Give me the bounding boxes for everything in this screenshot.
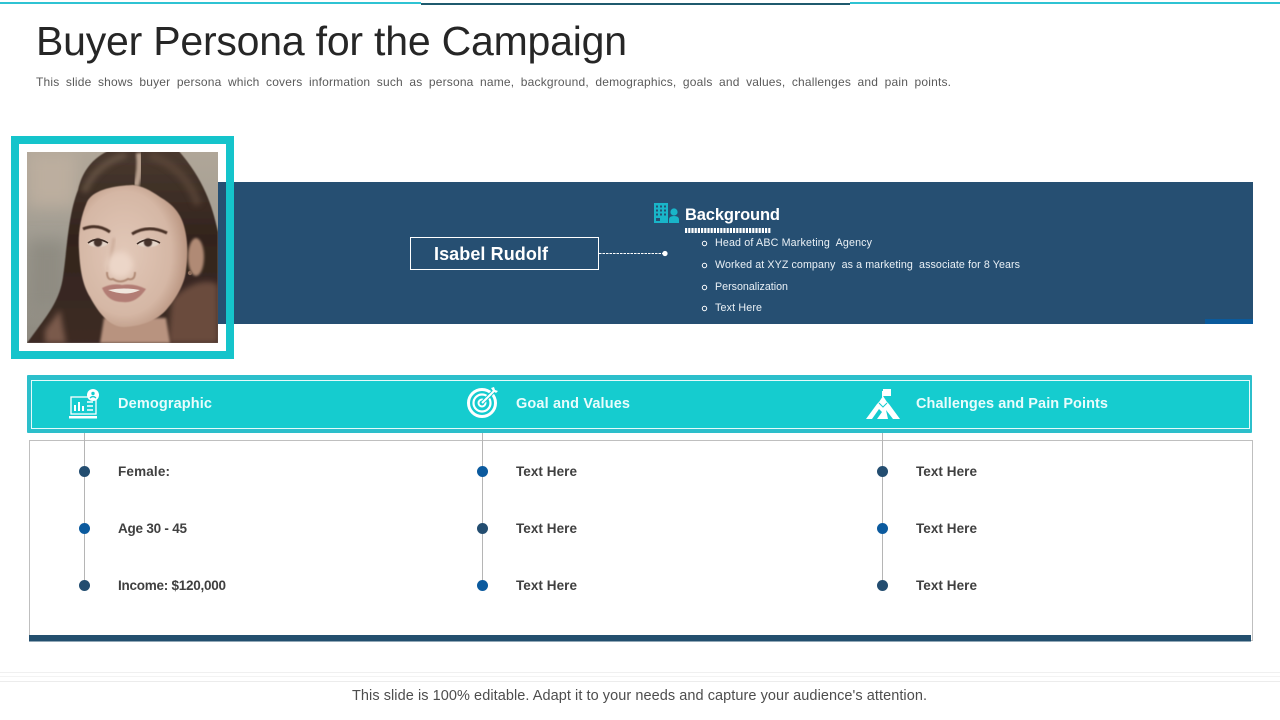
column: challenges details: Text Here [916, 578, 977, 593]
heading: goal and values: Goal and Values [516, 396, 630, 412]
background bullet list: Personalization [715, 281, 788, 293]
column: goal and values details: Text Here [516, 521, 577, 536]
column: challenges details: Text Here [916, 521, 977, 536]
column: demographic details: Female: [118, 464, 170, 479]
heading: challenges and pain points: Challenges and Pain Points [916, 396, 1108, 412]
background bullet list: Worked at XYZ company as a marketing associate for 8 Years [715, 259, 1020, 271]
persona photo frame [11, 136, 234, 359]
column: goal and values details: Text Here [516, 464, 577, 479]
panel: background banner [218, 182, 1253, 324]
portrait illustration [27, 150, 218, 343]
subtitle: This slide shows buyer persona which covers information such as persona name, background, demographics, goals and values, challenges and pain points. [36, 75, 951, 89]
column: goal and values details [477, 433, 577, 593]
column: demographic details: Age 30 - 45 [118, 521, 187, 536]
heading: demographic: Demographic [118, 396, 212, 412]
column: goal and values details: Text Here [516, 578, 577, 593]
icon: demographic chart [69, 389, 99, 418]
name box: Isabel Rudolf [434, 244, 549, 264]
icon: mountain with flag [866, 389, 900, 419]
background bullet list: Head of ABC Marketing Agency [715, 237, 873, 249]
icon: target [468, 387, 498, 416]
background bullet list: Text Here [715, 302, 762, 314]
icon: building and person [654, 203, 679, 223]
footer note: This slide is 100% editable. Adapt it to your needs and capture your audience's attention. [352, 688, 927, 704]
name box [410, 238, 598, 270]
column: challenges details: Text Here [916, 464, 977, 479]
footer divider [0, 672, 1280, 682]
heading: background: Background [685, 206, 780, 224]
column: demographic details [79, 433, 226, 593]
panel: column header band [27, 375, 1252, 433]
dotted underline [685, 228, 771, 233]
title: Buyer Persona for the Campaign [36, 18, 627, 64]
column: challenges details [877, 433, 977, 593]
column: demographic details: Income: $120,000 [118, 578, 226, 593]
top accent bar [0, 2, 1280, 5]
panel: detail table [29, 433, 1252, 642]
connector: name to background [599, 251, 668, 256]
background bullet list [702, 237, 1020, 314]
